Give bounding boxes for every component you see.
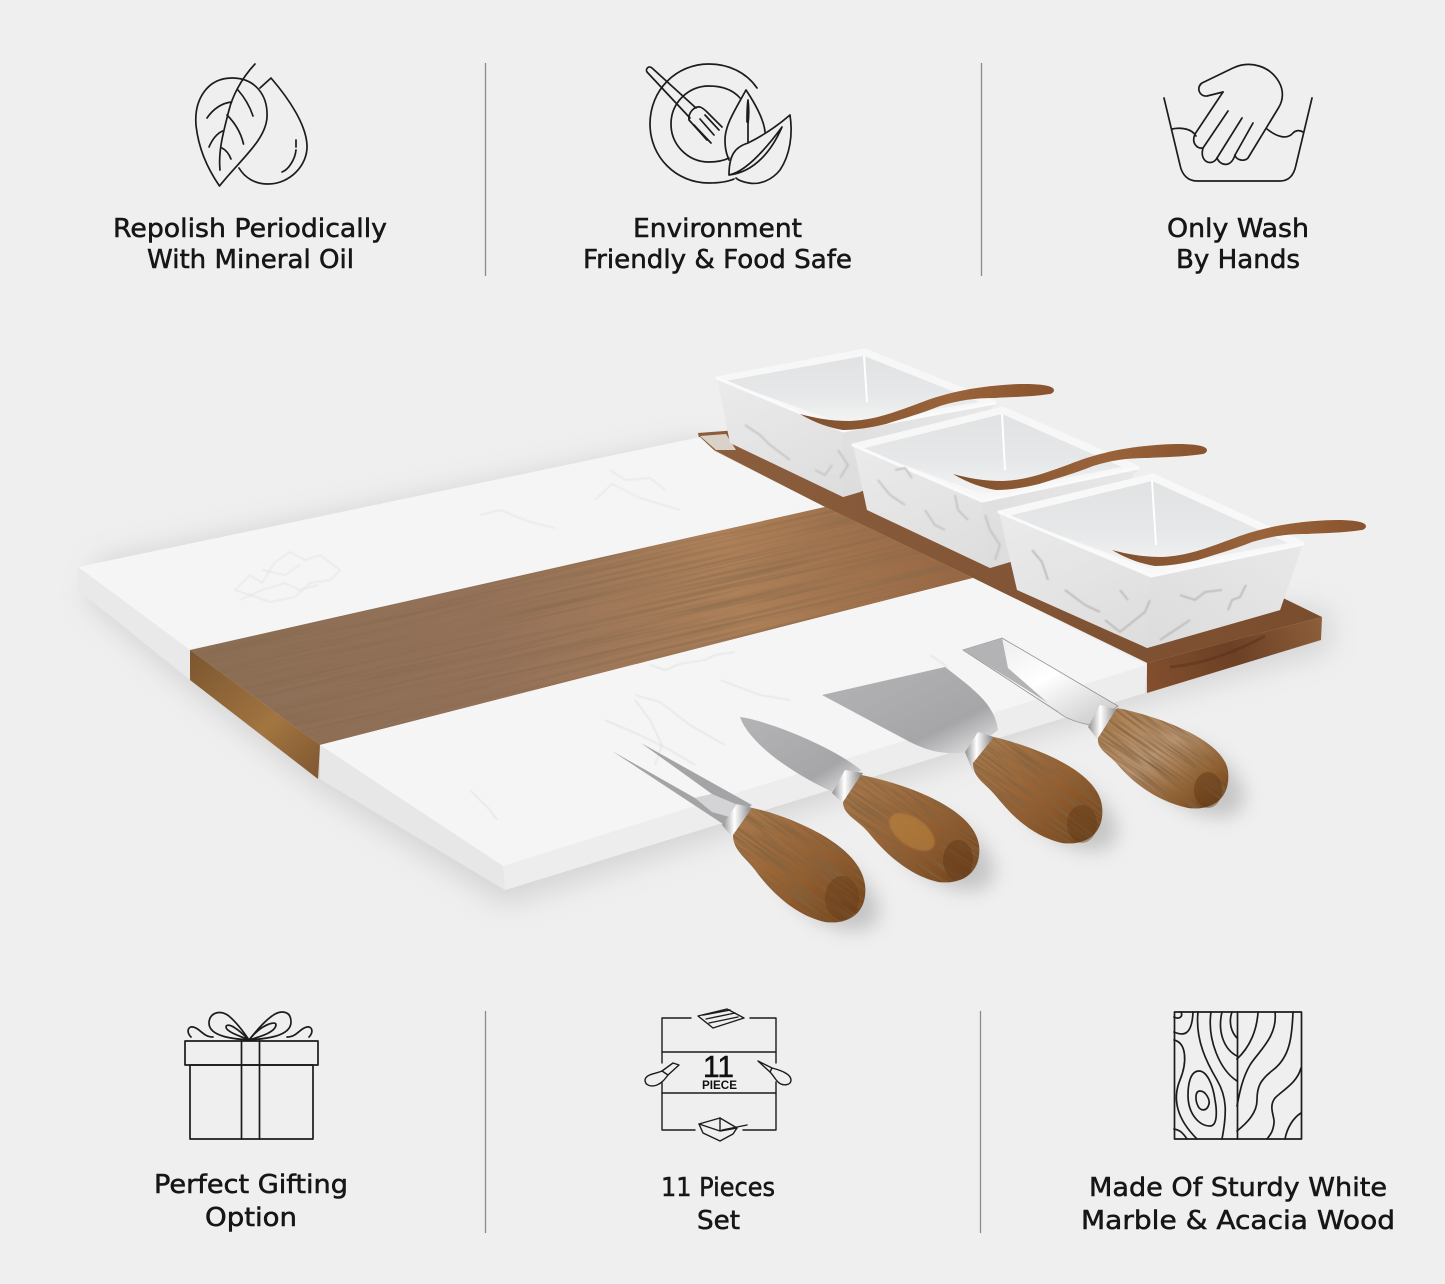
- heading: wash by hands: Only Wash: [1167, 214, 1309, 244]
- marble slab: upper: [78, 437, 825, 680]
- cheese fork: [613, 743, 866, 922]
- icon: wood grain: [1174, 1012, 1302, 1139]
- heading: 11 pieces: 11 Pieces: [661, 1173, 775, 1203]
- heading: environment friendly: [583, 214, 852, 275]
- icon: 11 piece diagram: [645, 1009, 791, 1141]
- bowl 2 with spoon: [853, 408, 1207, 568]
- serving tray: [698, 430, 1322, 693]
- divider: top left: [484, 63, 486, 276]
- divider: bottom left: [484, 1011, 486, 1233]
- heading: material: Made Of Sturdy White: [1089, 1173, 1387, 1203]
- heading: 11 pieces: Set: [697, 1206, 740, 1236]
- spoon 2: [953, 444, 1207, 490]
- marble slab: lower: [320, 578, 1147, 890]
- spoon 3: [1112, 520, 1366, 566]
- bowl 1 with spoon: [717, 350, 1054, 497]
- spoon 1: [800, 384, 1054, 430]
- panel: repolish: [113, 64, 387, 275]
- knife shadows: [767, 723, 1258, 947]
- icon: plate fork and leaves: [646, 64, 791, 183]
- cheese knife: [740, 717, 980, 882]
- divider: top right: [980, 63, 982, 276]
- panel: 11 pieces: [645, 1009, 791, 1236]
- heading: repolish: Repolish Periodically: [113, 214, 387, 244]
- icon: hand in basin: [1164, 64, 1312, 181]
- icon: leaves: [196, 64, 307, 186]
- icon: gift box: [185, 1012, 318, 1139]
- heading: material: Marble & Acacia Wood: [1081, 1206, 1395, 1236]
- panel: wash by hands: [1164, 64, 1312, 275]
- divider: bottom right: [980, 1011, 982, 1233]
- label: piece: PIECE: [702, 1080, 737, 1092]
- cheese spreader: [822, 667, 1102, 844]
- panel: gifting: [154, 1012, 348, 1233]
- heading: 11 pieces: [661, 1173, 775, 1236]
- wood grain: [196, 507, 952, 726]
- heading: gifting: Perfect Gifting: [154, 1170, 348, 1200]
- board shadow: [85, 440, 1330, 905]
- heading: material: [1081, 1173, 1395, 1236]
- product photo illustration: cheese board set: [84, 356, 1366, 938]
- bowl 3 with spoon: [999, 475, 1366, 648]
- panel: environment friendly: [583, 64, 852, 275]
- heading: gifting: [154, 1170, 348, 1233]
- number: 11: 11: [703, 1049, 734, 1084]
- heading: environment friendly: Environment: [633, 214, 802, 244]
- heading: environment friendly: Friendly & Food Safe: [583, 245, 852, 275]
- cheese slicer: [962, 638, 1228, 808]
- heading: wash by hands: By Hands: [1176, 245, 1300, 275]
- heading: gifting: Option: [205, 1203, 297, 1233]
- panel: material: [1081, 1012, 1395, 1236]
- heading: wash by hands: [1167, 214, 1309, 275]
- heading: repolish: [113, 214, 387, 275]
- wood slab: centre: [190, 507, 972, 779]
- heading: repolish: With Mineral Oil: [147, 245, 354, 275]
